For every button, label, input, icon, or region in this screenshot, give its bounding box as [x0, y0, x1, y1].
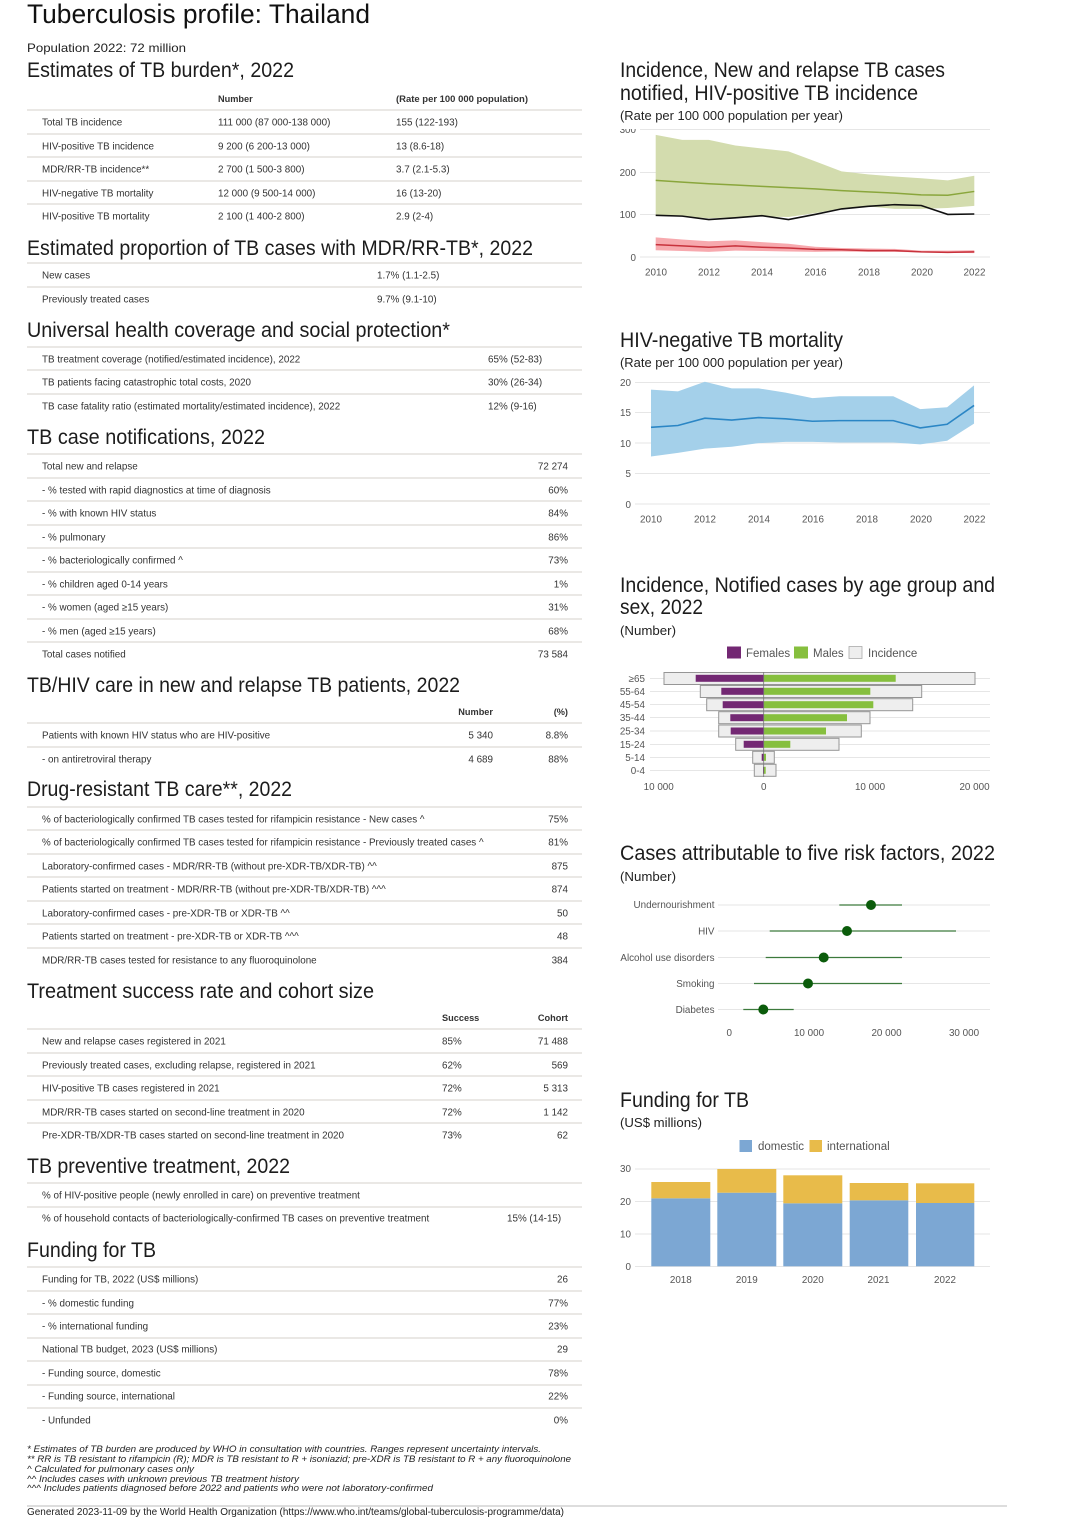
subheading: (Rate per 100 000 population per year) [620, 355, 843, 370]
rows: 23% [548, 1322, 568, 1332]
rows: % of bacteriologically confirmed TB cases tested for rifampicin resistance - New cases ^ [42, 814, 425, 826]
age labels: 55-64 [620, 687, 646, 698]
rows: 5 340 [468, 730, 494, 742]
rows: 5 313 [543, 1084, 569, 1094]
rows: 62% [442, 1060, 462, 1072]
age labels: 15-24 [620, 740, 646, 751]
rows: 72 274 [538, 462, 569, 472]
subheading: (US$ millions) [620, 1115, 702, 1130]
rows: 29 [557, 1344, 569, 1356]
rows [42, 354, 542, 412]
x axis labels [640, 514, 985, 526]
rows: 3.7 (2.1-5.3) [396, 164, 450, 176]
legend [740, 1140, 890, 1153]
rows: % of bacteriologically confirmed TB cases tested for rifampicin resistance - Previously treated cases ^ [42, 838, 484, 848]
risk labels: Diabetes [676, 1005, 715, 1016]
rows: 72% [442, 1084, 462, 1094]
generated note: Generated 2023-11-09 by the World Health Organization (https://www.who.int/teams/global-tuberculosis-programme/data) [27, 1507, 564, 1518]
risk labels: Smoking [676, 979, 714, 990]
rows: 874 [552, 884, 569, 896]
rows: 72% [442, 1108, 462, 1118]
rows: - % tested with rapid diagnostics at time of diagnosis [42, 486, 271, 496]
rows: 8.8% [546, 730, 568, 742]
rows: - % children aged 0-14 years [42, 580, 168, 590]
x axis labels: 2021 [868, 1275, 889, 1286]
rows: HIV-negative TB mortality [42, 188, 154, 200]
rows: 86% [548, 532, 568, 544]
panel: incidence chart [620, 59, 990, 278]
x axis labels: 2020 [802, 1275, 824, 1286]
footnotes: ^ Calculated for pulmonary cases only [27, 1464, 195, 1475]
footnotes: ^^^ Includes patients diagnosed before 2022 and patients who were not laboratory-confirmed [27, 1483, 434, 1494]
rows: Funding for TB, 2022 (US$ millions) [42, 1274, 198, 1286]
rows: 16 (13-20) [396, 188, 441, 200]
rows: 1 142 [543, 1108, 568, 1118]
rows: 1% [554, 580, 568, 590]
y axis labels: 0 [631, 253, 637, 264]
rows: - % domestic funding [42, 1298, 134, 1310]
rows: 65% (52-83) [488, 354, 542, 366]
x axis labels: 20 000 [959, 782, 990, 793]
risk labels: HIV [698, 926, 715, 938]
x axis labels: 2022 [964, 514, 985, 526]
panel: estimates of TB burden [27, 59, 582, 222]
rows: - Unfunded [42, 1416, 91, 1426]
rows: 85% [442, 1036, 462, 1048]
heading: Universal health coverage and social protection* [27, 319, 450, 342]
footnotes: ^^ Includes cases with unknown previous TB treatment history [27, 1474, 300, 1485]
risk labels: Undernourishment [634, 900, 715, 911]
panel: age and sex chart [620, 574, 995, 793]
table header [458, 707, 568, 717]
rows [42, 1274, 569, 1426]
rows: 155 (122-193) [396, 118, 458, 128]
rows: 9 200 (6 200-13 000) [218, 142, 310, 152]
y axis labels: 20 [620, 378, 632, 389]
age labels [620, 674, 646, 777]
x axis labels: 2022 [934, 1275, 956, 1286]
x axis labels: 0 [727, 1028, 733, 1039]
x axis labels: 2016 [802, 514, 824, 526]
rows [42, 814, 569, 966]
y axis labels: 0 [626, 500, 632, 511]
age labels: ≥65 [629, 674, 646, 685]
risk labels: Alcohol use disorders [620, 953, 715, 964]
subheading: (Number) [620, 869, 676, 884]
rows: Previously treated cases, excluding relapse, registered in 2021 [42, 1060, 316, 1072]
rows: 12 000 (9 500-14 000) [218, 188, 315, 200]
legend: Males [813, 648, 844, 660]
y axis labels: 10 [620, 1230, 632, 1240]
y axis labels [620, 129, 636, 261]
footnotes: * Estimates of TB burden are produced by WHO in consultation with countries. Ranges represent uncertainty intervals. [27, 1444, 541, 1455]
y axis labels: 0 [626, 1262, 632, 1273]
heading: TB preventive treatment, 2022 [27, 1155, 290, 1178]
legend: domestic [758, 1141, 804, 1153]
rows: Total cases notified [42, 650, 126, 660]
x axis labels: 2020 [910, 514, 932, 526]
rows: Pre-XDR-TB/XDR-TB cases started on second-line treatment in 2020 [42, 1130, 345, 1142]
x axis labels: 2016 [805, 268, 827, 278]
rows: 50 [557, 908, 569, 920]
rows: 78% [548, 1368, 568, 1380]
rows: 68% [548, 626, 568, 638]
rows: - % men (aged ≥15 years) [42, 626, 156, 638]
legend [727, 646, 917, 660]
panel: treatment success [27, 980, 582, 1142]
rows: TB treatment coverage (notified/estimated incidence), 2022 [42, 354, 300, 366]
rows: 81% [548, 838, 568, 848]
heading: notified, HIV-positive TB incidence [620, 82, 918, 105]
y axis labels: 20 [620, 1197, 632, 1208]
population: Population 2022: 72 million [27, 41, 186, 55]
x axis labels: 2010 [645, 268, 667, 278]
rows: 30% (26-34) [488, 378, 542, 388]
panel: universal health coverage [27, 319, 582, 412]
rows [42, 462, 569, 660]
ranges and points [743, 900, 956, 1014]
rows: MDR/RR-TB cases started on second-line treatment in 2020 [42, 1108, 305, 1118]
rows: New cases [42, 270, 90, 282]
rows: 48 [557, 932, 569, 942]
x axis labels: 2022 [964, 268, 985, 278]
table header: Number [458, 707, 493, 717]
rows: 73% [442, 1130, 462, 1142]
mortality series [651, 382, 974, 457]
heading: sex, 2022 [620, 596, 703, 619]
rows: 1.7% (1.1-2.5) [377, 270, 439, 282]
rows: 875 [552, 862, 569, 872]
x axis labels: 10 000 [644, 782, 674, 793]
rows: 26 [557, 1274, 569, 1286]
rows: 2 100 (1 400-2 800) [218, 212, 304, 222]
heading: Funding for TB [27, 1239, 156, 1262]
rows: 15% (14-15) [507, 1214, 561, 1224]
rows: 84% [548, 508, 568, 520]
rows: 0% [554, 1416, 568, 1426]
rows: 73% [548, 556, 568, 566]
heading: Funding for TB [620, 1089, 749, 1112]
x axis labels: 20 000 [871, 1028, 902, 1039]
legend: Incidence [868, 648, 917, 660]
rows: 13 (8.6-18) [396, 142, 444, 152]
x axis labels: 10 000 [794, 1028, 825, 1039]
heading: TB/HIV care in new and relapse TB patients, 2022 [27, 674, 460, 697]
rows: Patients started on treatment - pre-XDR-TB or XDR-TB ^^^ [42, 932, 299, 942]
x axis labels [644, 782, 990, 793]
y axis labels [620, 1164, 632, 1273]
table header: (Rate per 100 000 population) [396, 94, 528, 104]
panel: TB/HIV care [27, 674, 582, 766]
legend: international [827, 1141, 890, 1153]
rows: HIV-positive TB mortality [42, 212, 150, 222]
female bars [696, 675, 764, 774]
age labels: 35-44 [620, 713, 646, 724]
incidence series [656, 135, 974, 253]
rows: 75% [548, 814, 568, 826]
legend: Females [746, 648, 790, 660]
footnotes: ** RR is TB resistant to rifampicin (R); MDR is TB resistant to R + isoniazid; pre-XDR is TB resistant to R + any fluoroquinolone [27, 1454, 571, 1465]
risk labels [620, 900, 715, 1016]
y axis labels: 30 [620, 1164, 632, 1175]
x axis labels: 2012 [694, 514, 716, 526]
x axis labels: 2020 [911, 268, 933, 278]
subheading: (Rate per 100 000 population per year) [620, 108, 843, 123]
x axis labels [670, 1275, 956, 1286]
international bars [651, 1169, 974, 1203]
x axis labels: 2012 [698, 268, 720, 278]
x axis labels [727, 1028, 980, 1039]
panel: funding chart [620, 1089, 990, 1286]
rows: 2.9 (2-4) [396, 212, 433, 222]
rows: % of household contacts of bacteriologically-confirmed TB cases on preventive treatment [42, 1214, 429, 1224]
rows: Laboratory-confirmed cases - pre-XDR-TB or XDR-TB ^^ [42, 908, 290, 920]
rows: - % international funding [42, 1322, 148, 1332]
y axis labels: 5 [626, 469, 632, 480]
panel: HIV-negative mortality chart [620, 329, 990, 526]
rows: 569 [552, 1060, 569, 1072]
x axis labels: 2010 [640, 514, 662, 526]
panel: funding table [27, 1239, 582, 1426]
rows: HIV-positive TB cases registered in 2021 [42, 1084, 220, 1094]
rows [42, 270, 439, 306]
rows: Total TB incidence [42, 118, 123, 128]
x axis labels: 2019 [736, 1275, 758, 1286]
x axis labels: 2014 [751, 268, 773, 278]
x axis labels: 2018 [858, 268, 880, 278]
heading: Incidence, New and relapse TB cases [620, 59, 945, 82]
domestic bars [651, 1193, 974, 1266]
heading: Incidence, Notified cases by age group and [620, 574, 995, 597]
rows: 62 [557, 1130, 568, 1142]
rows: 2 700 (1 500-3 800) [218, 164, 304, 176]
rows [42, 1190, 561, 1224]
incidence boxes [664, 672, 975, 776]
heading: HIV-negative TB mortality [620, 329, 843, 352]
rows: 60% [548, 486, 568, 496]
rows: Laboratory-confirmed cases - MDR/RR-TB (without pre-XDR-TB/XDR-TB) ^^ [42, 862, 377, 872]
age labels: 0-4 [631, 766, 646, 777]
y axis labels [620, 378, 632, 511]
rows: 12% (9-16) [488, 402, 537, 412]
panel: risk factors chart [620, 842, 995, 1039]
rows: 77% [548, 1298, 568, 1310]
rows: 88% [548, 754, 568, 766]
heading [620, 574, 995, 619]
rows: Patients started on treatment - MDR/RR-TB (without pre-XDR-TB/XDR-TB) ^^^ [42, 884, 386, 896]
heading: TB case notifications, 2022 [27, 426, 265, 449]
rows: MDR/RR-TB incidence** [42, 164, 149, 176]
rows [42, 118, 458, 222]
y axis labels: 15 [620, 408, 632, 419]
table header: Number [218, 94, 253, 104]
panel: drug-resistant TB care [27, 778, 582, 966]
rows: Patients with known HIV status who are HIV-positive [42, 730, 271, 742]
rows [42, 1036, 569, 1142]
heading: Cases attributable to five risk factors, 2022 [620, 842, 995, 865]
rows: - Funding source, international [42, 1392, 175, 1402]
table header [442, 1013, 568, 1023]
rows: - on antiretroviral therapy [42, 754, 152, 766]
rows: 9.7% (9.1-10) [377, 294, 437, 306]
age labels: 5-14 [625, 753, 646, 764]
table header: Cohort [538, 1013, 568, 1023]
table header: (%) [554, 707, 568, 717]
table header [218, 94, 528, 104]
x axis labels: 2018 [670, 1275, 692, 1286]
rows: 22% [548, 1392, 568, 1402]
x axis labels: 30 000 [949, 1028, 980, 1039]
heading [620, 59, 945, 105]
x axis labels: 10 000 [855, 782, 886, 793]
age labels: 25-34 [620, 726, 646, 738]
y axis labels: 10 [620, 439, 632, 450]
heading: Estimated proportion of TB cases with MDR/RR-TB*, 2022 [27, 237, 533, 260]
rows: - % pulmonary [42, 532, 106, 544]
x axis labels: 2018 [856, 514, 878, 526]
x axis labels: 2014 [748, 514, 770, 526]
rows: - % bacteriologically confirmed ^ [42, 556, 183, 566]
table header: Success [442, 1013, 479, 1023]
rows: TB case fatality ratio (estimated mortality/estimated incidence), 2022 [42, 402, 340, 412]
rows: MDR/RR-TB cases tested for resistance to any fluoroquinolone [42, 956, 317, 966]
rows: TB patients facing catastrophic total costs, 2020 [42, 378, 252, 388]
rows: - % with known HIV status [42, 508, 156, 520]
rows: Previously treated cases [42, 294, 149, 306]
rows: 384 [552, 956, 569, 966]
rows: % of HIV-positive people (newly enrolled in care) on preventive treatment [42, 1190, 360, 1202]
x axis labels [645, 268, 985, 278]
rows: 4 689 [468, 754, 494, 766]
y axis labels: 300 [620, 125, 637, 136]
footnotes [27, 1444, 571, 1494]
rows: New and relapse cases registered in 2021 [42, 1036, 226, 1048]
panel: TB preventive treatment [27, 1155, 582, 1224]
rows: National TB budget, 2023 (US$ millions) [42, 1344, 217, 1356]
heading: Estimates of TB burden*, 2022 [27, 59, 294, 82]
heading: Drug-resistant TB care**, 2022 [27, 778, 292, 801]
rows [42, 730, 568, 766]
rows: 111 000 (87 000-138 000) [218, 118, 330, 128]
panel: TB case notifications [27, 426, 582, 660]
age labels: 45-54 [620, 700, 646, 711]
heading: Treatment success rate and cohort size [27, 980, 374, 1003]
y axis labels: 100 [620, 210, 637, 221]
rows: - % women (aged ≥15 years) [42, 602, 168, 614]
rows: Total new and relapse [42, 462, 138, 472]
x axis labels: 0 [761, 782, 767, 793]
rows: HIV-positive TB incidence [42, 142, 155, 152]
y axis labels: 200 [620, 168, 637, 179]
rows: 31% [548, 602, 568, 614]
rows: 71 488 [538, 1036, 569, 1048]
rows: 73 584 [538, 650, 569, 660]
male bars [764, 675, 896, 774]
subheading: (Number) [620, 623, 676, 638]
rows: - Funding source, domestic [42, 1368, 161, 1380]
panel: MDR proportion [27, 237, 582, 306]
